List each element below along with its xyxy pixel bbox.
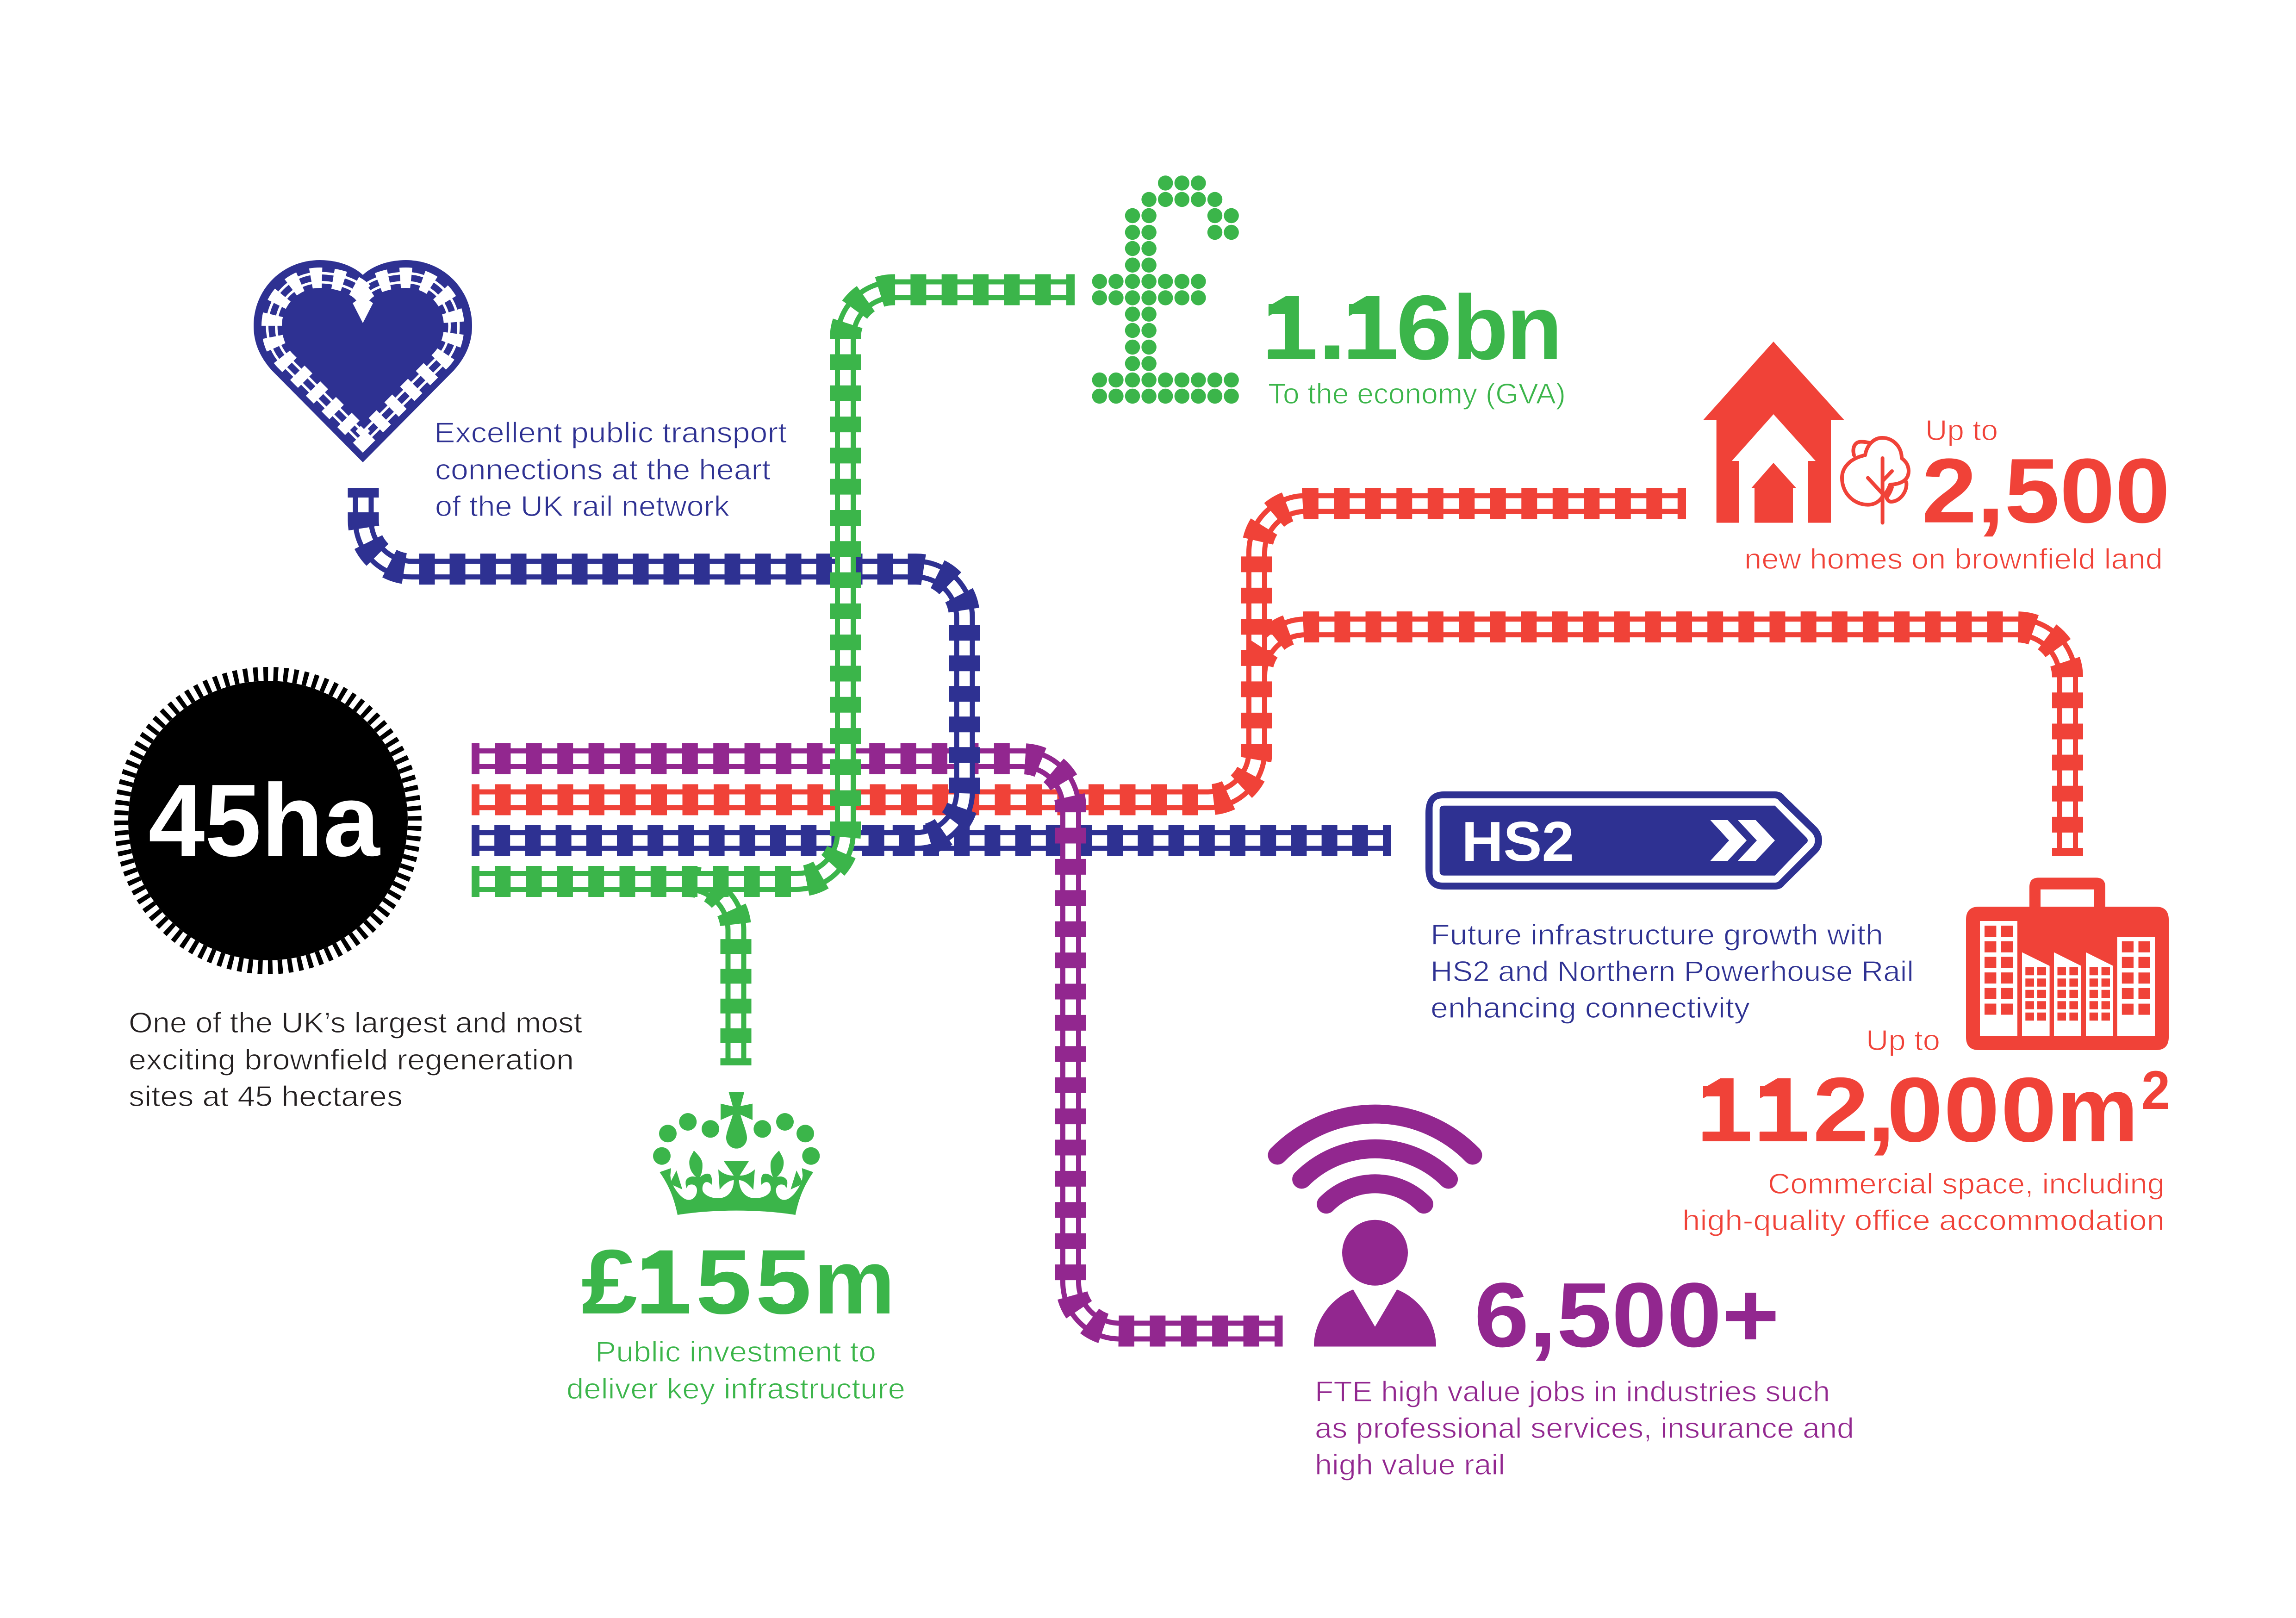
stat: £155m public investment: deliver key infrastructure [566, 1373, 905, 1405]
icon: HS2 road sign: HS2 [1462, 810, 1574, 873]
stat: 6,500+ jobs: 6,500+ [1474, 1263, 1780, 1366]
icon: heart with white track [254, 260, 472, 462]
text: HS2 caption: Future infrastructure growth with [1431, 919, 1883, 951]
stat: up to 2,500 new homes: Up to [1925, 415, 1998, 447]
track: HS2 blue line [472, 830, 1391, 851]
stat: up to 112,000 m2 commercial space: 112,000 [1696, 1059, 2057, 1161]
text: public transport caption: connections at the heart [435, 454, 771, 486]
stat: 6,500+ jobs: high value rail [1315, 1449, 1505, 1481]
text: brownfield site caption [129, 1007, 582, 1113]
stat: £155m public investment: £155 [581, 1231, 811, 1333]
icon: dotted pound sign [1100, 183, 1232, 396]
track: blue line from heart [363, 488, 964, 840]
icon: crown [653, 1092, 820, 1215]
stat: 1.16bn to the economy: To the economy (GVA) [1268, 378, 1566, 410]
stat: up to 112,000 m2 commercial space: 2 [2141, 1060, 2170, 1121]
icon: house [1703, 342, 1844, 523]
stat: up to 112,000 m2 commercial space: Up to [1866, 1025, 1940, 1057]
stat: up to 112,000 m2 commercial space: high-quality office accommodation [1682, 1205, 2165, 1237]
stat: up to 112,000 m2 commercial space: m [2057, 1058, 2138, 1161]
text: brownfield site caption: One of the UK’s largest and most [129, 1007, 582, 1039]
text: HS2 caption: enhancing connectivity [1431, 992, 1750, 1024]
track: red line with two branches [472, 504, 2068, 856]
track: purple line [472, 759, 1283, 1331]
stat: up to 112,000 m2 commercial space [1682, 1025, 2170, 1237]
icon: HS2 road sign [1425, 791, 1822, 890]
text: brownfield site caption: sites at 45 hectares [129, 1081, 403, 1113]
stat: 1.16bn to the economy: bn [1452, 276, 1562, 379]
stat: £155m public investment [566, 1231, 905, 1405]
text: HS2 caption [1431, 919, 1914, 1024]
stat: up to 2,500 new homes: new homes on brownfield land [1744, 543, 2163, 575]
track: green main line [472, 290, 1075, 881]
stat: 6,500+ jobs [1315, 1263, 1854, 1481]
stat: £155m public investment: Public investment to [595, 1336, 876, 1368]
stat: 6,500+ jobs: FTE high value jobs in industries such [1315, 1376, 1830, 1408]
stat: 1.16bn to the economy [1262, 276, 1566, 410]
text: public transport caption: of the UK rail network [435, 491, 730, 523]
text: HS2 caption: HS2 and Northern Powerhouse Rail [1431, 956, 1914, 988]
stat: 1.16bn to the economy: 1.16 [1262, 277, 1452, 379]
stat: 6,500+ jobs: as professional services, insurance and [1315, 1413, 1854, 1444]
stat: up to 2,500 new homes [1744, 415, 2170, 575]
stat: up to 2,500 new homes: 2,500 [1922, 440, 2170, 542]
text: public transport caption: Excellent public transport [434, 417, 787, 449]
text: public transport caption [434, 417, 787, 523]
icon: tree [1842, 438, 1909, 523]
icon: person with wifi signal [1277, 1114, 1473, 1347]
track: green branch to crown [681, 881, 736, 1065]
stat: £155m public investment: m [814, 1231, 895, 1333]
icon: circle with 45ha: 45ha [148, 763, 380, 878]
icon: briefcase with buildings [1966, 877, 2169, 1050]
stat: up to 112,000 m2 commercial space: Commercial space, including [1768, 1168, 2165, 1200]
text: brownfield site caption: exciting brownfield regeneration [129, 1044, 574, 1076]
icon: circle with 45ha [121, 674, 415, 967]
